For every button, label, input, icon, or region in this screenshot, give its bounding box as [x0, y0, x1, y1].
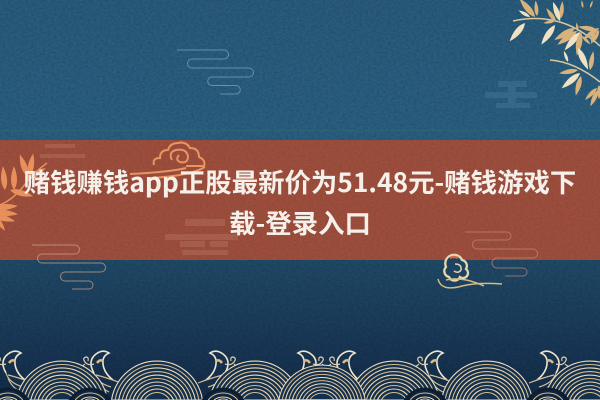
icon: orange cloud	[130, 143, 205, 178]
cloud line: top left	[177, 50, 253, 94]
icon: orange bamboo in band	[0, 153, 47, 232]
title: 赌钱赚钱app正股最新价为51.48元-赌钱游戏下	[24, 161, 576, 200]
waves: crests	[0, 351, 573, 392]
cloud line: lower right	[465, 232, 538, 276]
icon: bamboo branches	[507, 0, 600, 107]
band	[0, 140, 600, 260]
motif: band faint bars	[40, 144, 238, 255]
waves: small front row	[0, 389, 568, 400]
cloud line: lower left	[32, 245, 106, 289]
icon: gold cloud	[438, 255, 502, 288]
title	[24, 161, 576, 241]
waves: large row	[17, 361, 600, 400]
motif: top right faint bars	[485, 81, 537, 108]
waves	[0, 351, 600, 400]
faint horizontal line	[0, 130, 600, 131]
title: 载-登录入口	[229, 202, 371, 241]
